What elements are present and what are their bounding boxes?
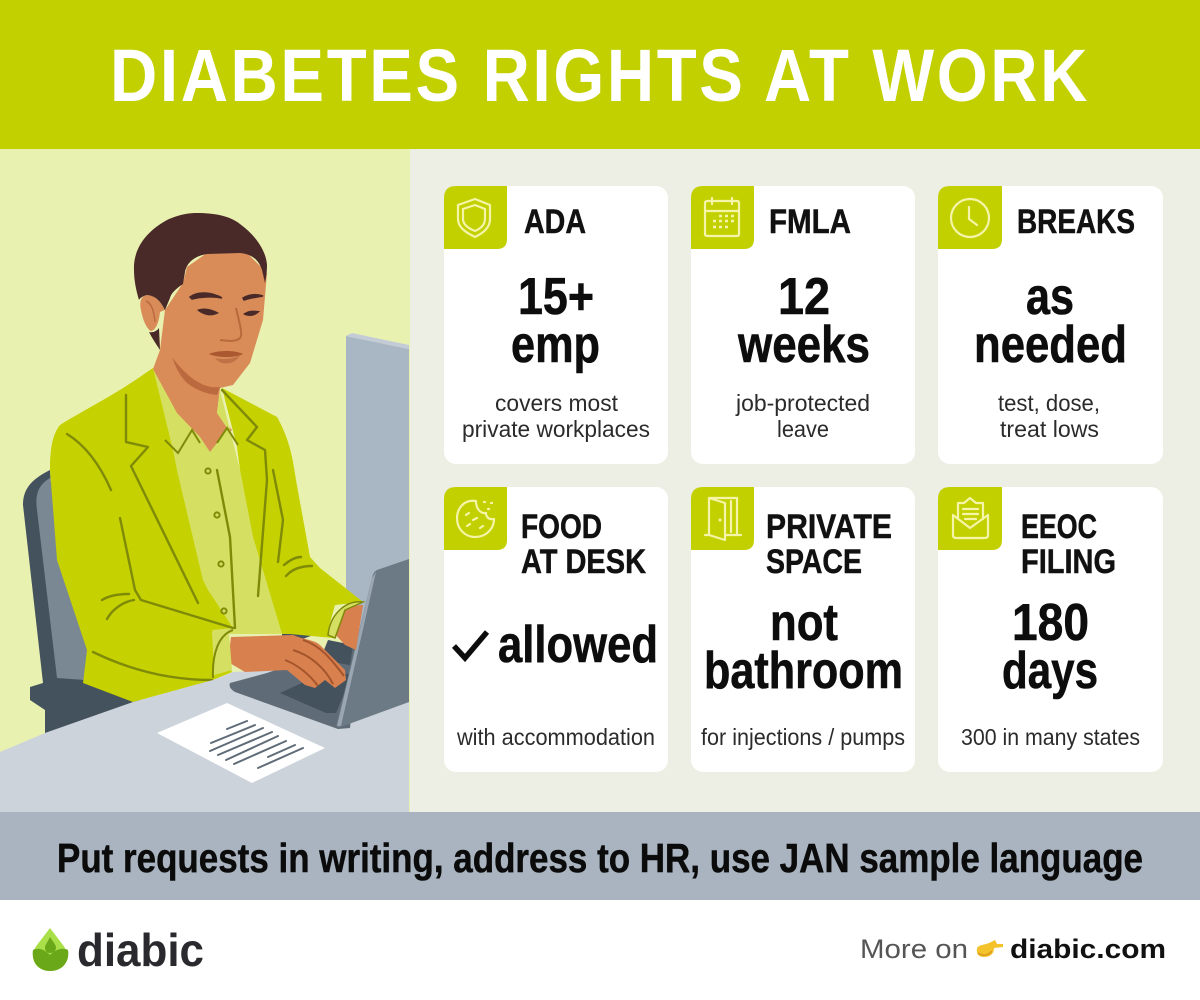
- panel: illustration of woman at desk: [0, 149, 410, 812]
- header banner: [0, 0, 1200, 149]
- title: DIABETES RIGHTS AT WORK: [110, 34, 1090, 117]
- card: FMLA: FMLA: [769, 203, 851, 241]
- card: food at desk: [444, 487, 668, 772]
- icon: cookie: [444, 487, 507, 550]
- card: EEOC filing: days: [1002, 642, 1098, 700]
- jacket: [50, 368, 363, 702]
- card: ADA: emp: [511, 316, 600, 374]
- card: ADA: private workplaces: [462, 416, 650, 442]
- buttons: [205, 468, 227, 614]
- card: FMLA: job-protected: [735, 390, 870, 416]
- hands: [212, 602, 363, 688]
- footer: [33, 924, 1166, 976]
- link: more on diabic.com: [860, 934, 1166, 964]
- facial features: [190, 293, 263, 363]
- paper document: [157, 703, 325, 783]
- card: EEOC filing: 180: [1012, 594, 1089, 652]
- icon: pointing hand: [977, 940, 1003, 957]
- card: FMLA: [691, 186, 915, 464]
- card: private space: [691, 487, 915, 772]
- card: breaks: [938, 186, 1163, 464]
- card: private space: PRIVATE: [766, 508, 892, 546]
- card: EEOC filing: 300 in many states: [961, 724, 1140, 750]
- card: ADA: covers most: [495, 390, 619, 416]
- card: EEOC filing: [938, 487, 1163, 772]
- card: private space: for injections / pumps: [701, 724, 905, 750]
- card: ADA: 15+: [518, 268, 594, 326]
- card: breaks: BREAKS: [1017, 203, 1135, 241]
- card: ADA: ADA: [524, 203, 586, 241]
- icon: envelope: [938, 487, 1002, 550]
- card: private space: SPACE: [766, 543, 862, 581]
- laptop: [230, 559, 409, 729]
- office chair: [23, 470, 316, 740]
- card: ADA: [444, 186, 668, 464]
- panel: rights cards: [410, 149, 1200, 812]
- partition: [346, 333, 409, 720]
- icon: green drop: [33, 928, 68, 971]
- card: breaks: as: [1026, 268, 1074, 326]
- jacket seams: [67, 390, 312, 680]
- shirt collar: [165, 428, 238, 453]
- card: EEOC filing: FILING: [1021, 543, 1116, 581]
- card: private space: bathroom: [704, 642, 903, 700]
- bottom tip band: [0, 812, 1200, 900]
- icon: check mark: [454, 632, 487, 658]
- icon: clock: [938, 186, 1002, 249]
- icon: door: [691, 487, 754, 550]
- card: FMLA: leave: [777, 416, 829, 442]
- logo: diabic: diabic: [77, 924, 204, 976]
- card: FMLA: weeks: [737, 316, 870, 374]
- card: food at desk: with accommodation: [456, 724, 655, 750]
- ear: [140, 295, 165, 331]
- card: food at desk: allowed: [498, 616, 658, 674]
- card: breaks: needed: [974, 316, 1127, 374]
- card: EEOC filing: EEOC: [1021, 508, 1097, 546]
- desk: [0, 660, 409, 812]
- hair: [134, 213, 267, 350]
- link: more on diabic.com: More on: [860, 934, 968, 964]
- card: breaks: test, dose,: [998, 390, 1100, 416]
- neck and face: [140, 253, 267, 455]
- card: FMLA: 12: [778, 268, 830, 326]
- card: private space: not: [770, 594, 838, 652]
- icon: shield: [444, 186, 507, 249]
- link: more on diabic.com: diabic.com: [1010, 934, 1166, 964]
- card: breaks: treat lows: [1000, 416, 1099, 442]
- icon: calendar: [691, 186, 754, 249]
- card: food at desk: AT DESK: [521, 543, 646, 581]
- shirt: [147, 369, 282, 634]
- card: food at desk: FOOD: [521, 508, 602, 546]
